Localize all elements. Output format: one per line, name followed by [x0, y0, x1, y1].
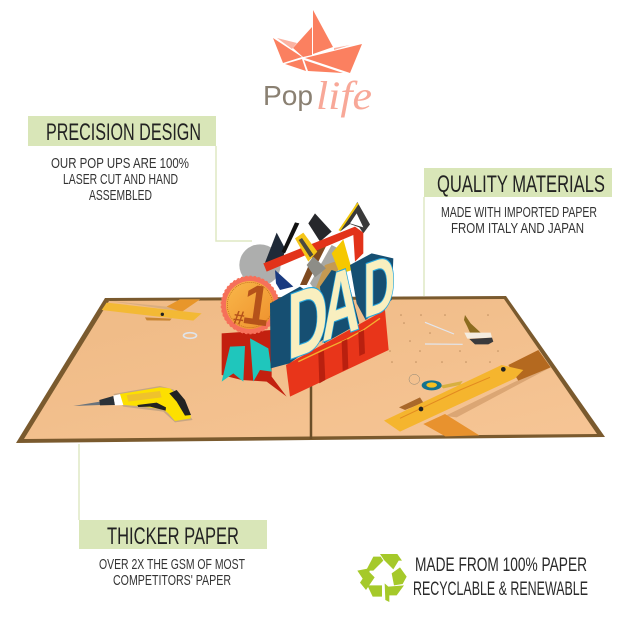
toolbox front	[286, 310, 389, 397]
text: quality description: FROM ITALY AND JAPAN	[451, 220, 584, 237]
icon: nut	[184, 333, 196, 338]
toolbox left side	[222, 330, 287, 397]
card base	[16, 296, 605, 443]
wordmark	[263, 73, 372, 118]
lettering: DAD	[287, 237, 395, 380]
wordmark: Pop	[263, 80, 313, 111]
heading: precision design	[28, 116, 216, 146]
saw blade	[239, 244, 281, 286]
logo: Poplife	[263, 10, 372, 118]
top-left wood plank	[102, 299, 202, 321]
medal	[221, 273, 279, 339]
panel: recycled paper	[357, 554, 588, 602]
ribbons	[222, 338, 272, 382]
medal: #	[232, 307, 246, 330]
wordmark: life	[316, 73, 372, 118]
pop-up: dad toolbox	[221, 202, 395, 397]
text: thicker paper description: OVER 2X THE GSM OF MOST	[99, 556, 245, 573]
lettering: DAD: D	[287, 261, 328, 380]
text: precision description: OUR POP UPS ARE 100%	[51, 155, 189, 172]
heading: precision design: PRECISION DESIGN	[46, 119, 201, 146]
panel: quality materials	[424, 168, 612, 237]
lettering: DAD: A	[322, 244, 360, 363]
callout line: thicker paper	[78, 444, 80, 520]
text: thicker paper description	[99, 556, 245, 589]
text: precision description: LASER CUT AND HAND	[63, 171, 178, 188]
letter extrusions	[270, 253, 393, 368]
icon: recycling symbol	[357, 554, 407, 602]
icon: nails	[425, 322, 463, 344]
tools in box	[265, 202, 370, 290]
callout line: precision design	[216, 146, 252, 241]
open pop-up card	[16, 296, 605, 443]
icon: tape measure	[409, 374, 463, 390]
card inner surface	[24, 299, 597, 439]
icon: wood planks	[384, 350, 551, 436]
icon: paint brush	[464, 315, 493, 344]
medal: 1	[239, 273, 274, 339]
speckles	[339, 314, 499, 363]
icon: origami boat	[273, 10, 362, 73]
text: precision description: ASSEMBLED	[89, 187, 152, 204]
icon: drill	[73, 386, 193, 422]
lettering: DAD: D	[363, 237, 395, 335]
text: thicker paper description: COMPETITORS' PAPER	[113, 572, 231, 589]
panel: precision design	[28, 116, 216, 204]
callout line: quality materials	[423, 197, 425, 296]
toolbox handle	[263, 227, 363, 272]
text: precision description	[51, 155, 189, 204]
panel: thicker paper	[79, 520, 267, 589]
tools in front of handle	[295, 233, 352, 277]
text: quality description	[441, 204, 597, 237]
right side tools	[384, 315, 551, 436]
heading: thicker paper	[79, 520, 267, 550]
fold line	[310, 375, 312, 439]
heading: thicker paper: THICKER PAPER	[107, 523, 239, 550]
text: recycled paper	[413, 555, 588, 600]
